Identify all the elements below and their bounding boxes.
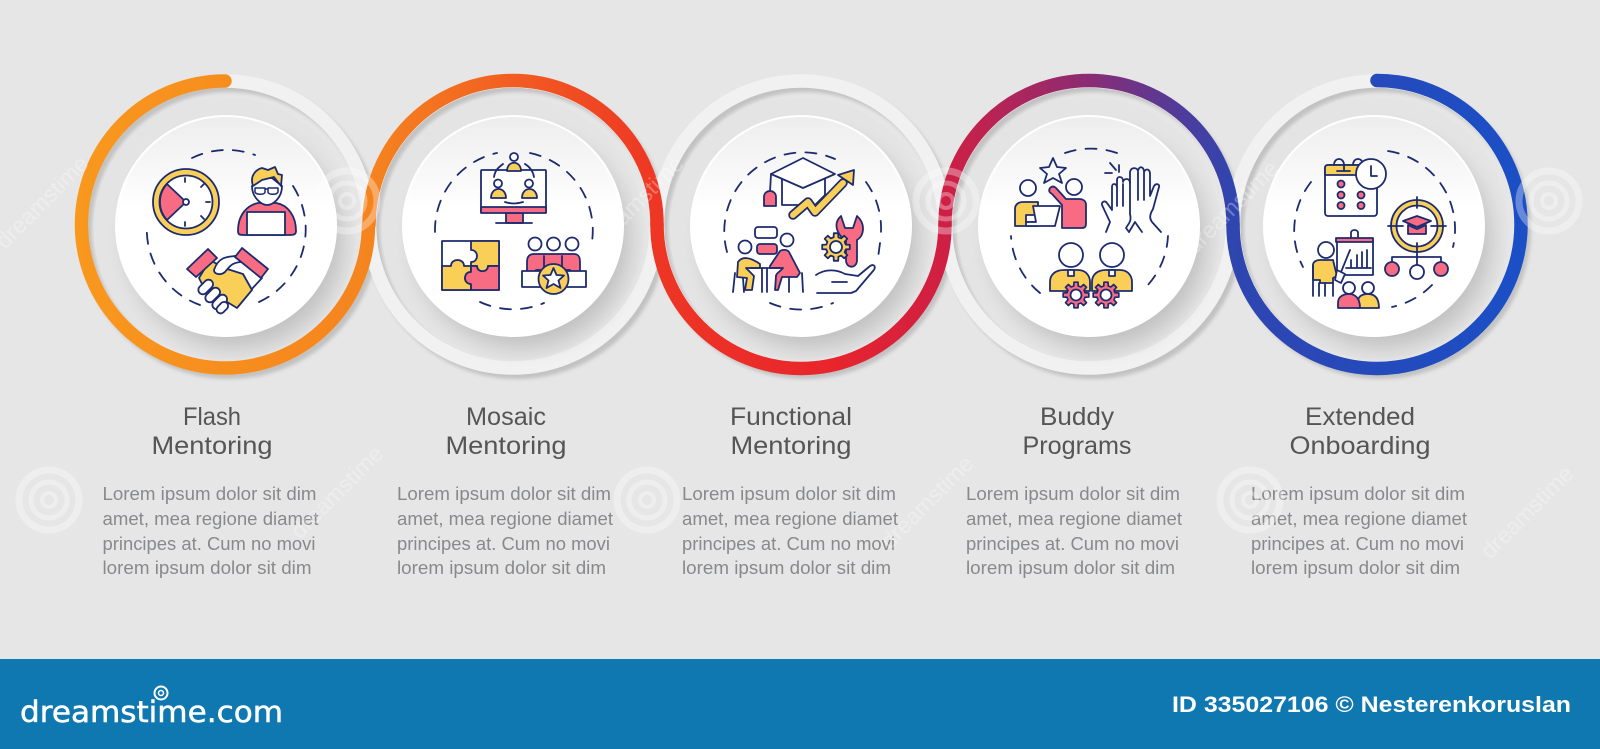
body text 5: Lorem ipsum dolor sit dim (1251, 484, 1465, 504)
clock (153, 169, 219, 235)
column 5 (1251, 403, 1467, 578)
ribbon segment 3 red (657, 224, 945, 368)
ring shadows (86, 86, 1524, 372)
body text 3: principes at. Cum no movi (682, 534, 895, 554)
dreamstime logo: dreamstime.com (20, 695, 283, 729)
dashed circle 5 (1294, 151, 1455, 307)
star (1040, 158, 1066, 183)
ribbon segment 1 orange (82, 81, 369, 368)
watermark spirals and text: dreamstime (285, 440, 388, 544)
heading: Functional Mentoring: Functional (730, 403, 852, 431)
watermark spirals and text: dreamstime (875, 450, 978, 554)
watermark spirals and text (0, 150, 1579, 564)
target with cap (1388, 197, 1446, 256)
heading: Mosaic Mentoring: Mosaic (466, 403, 546, 431)
body text 5 (1251, 484, 1467, 578)
body text 2 (397, 484, 613, 578)
icon 5: extended onboarding (1294, 151, 1455, 308)
heading: Extended Onboarding (1290, 403, 1430, 460)
growth arrow (793, 170, 854, 215)
graduation cap (764, 158, 835, 206)
disc shadows (127, 132, 1491, 348)
body text 1: Lorem ipsum dolor sit dim (102, 484, 316, 504)
body text 5: amet, mea regione diamet (1251, 509, 1467, 529)
body text 1: lorem ipsum dolor sit dim (102, 558, 312, 578)
calendar with clock (1325, 159, 1386, 216)
body text 3: amet, mea regione diamet (682, 509, 898, 529)
white discs (116, 116, 1484, 336)
body text 5: principes at. Cum no movi (1251, 534, 1464, 554)
body text 4: Lorem ipsum dolor sit dim (966, 484, 1180, 504)
icon 2: mosaic mentoring (435, 153, 593, 309)
body text 4: amet, mea regione diamet (966, 509, 1182, 529)
monitor with people (481, 153, 546, 223)
connected colored ribbon (82, 80, 1521, 368)
body text 5: lorem ipsum dolor sit dim (1251, 558, 1460, 578)
column 4 (966, 403, 1182, 578)
dashed circle 2 (435, 153, 593, 309)
body text 2: principes at. Cum no movi (397, 534, 610, 554)
heading: Buddy Programs (1022, 403, 1132, 460)
heading: Mosaic Mentoring (446, 403, 566, 460)
body text 1 (102, 484, 318, 578)
dashed circle 1 (147, 150, 306, 305)
ribbon segment 2 orange to red (369, 80, 657, 224)
inner ring floors (94, 97, 1508, 359)
watermark spirals and text: dreamstime (585, 150, 688, 254)
heading: Functional Mentoring (730, 403, 852, 460)
watermark spirals and text: dreamstime (1180, 155, 1283, 259)
heading: Functional Mentoring: Mentoring (730, 432, 852, 460)
body text 2: amet, mea regione diamet (397, 509, 613, 529)
heading: Extended Onboarding: Onboarding (1290, 432, 1430, 460)
heading: Mosaic Mentoring: Mentoring (446, 432, 566, 460)
ribbon segment 5 blue (1233, 80, 1521, 368)
dashed circle 3 (724, 152, 881, 310)
person with laptop (238, 167, 296, 235)
body text 4: principes at. Cum no movi (966, 534, 1179, 554)
high five hands (1102, 163, 1161, 232)
body text 1: principes at. Cum no movi (102, 534, 316, 554)
column 3 (682, 403, 898, 578)
body text 4: lorem ipsum dolor sit dim (966, 558, 1175, 578)
presenter and board (1313, 230, 1373, 296)
heading: Buddy Programs: Buddy (1040, 403, 1115, 431)
heading: Flash Mentoring (152, 403, 272, 460)
ring tracks (82, 81, 1520, 368)
gear and wrench in hand (816, 216, 875, 293)
icon 1: flash mentoring (147, 150, 306, 315)
handshake (187, 248, 268, 315)
two colleagues with laptop (1015, 179, 1086, 228)
footer bar (0, 659, 1600, 749)
column 2 (397, 403, 613, 578)
hierarchy (1385, 256, 1448, 279)
body text 1: amet, mea regione diamet (102, 509, 318, 529)
body text 3 (682, 484, 898, 578)
two people at table (733, 227, 803, 292)
body text 2: Lorem ipsum dolor sit dim (397, 484, 611, 504)
icon 4: buddy programs (1011, 149, 1168, 308)
puzzle (442, 241, 499, 290)
image id and author: ID 335027106 © Nesterenkoruslan (1172, 692, 1571, 717)
heading: Flash Mentoring: Flash (183, 403, 241, 431)
body text 3: lorem ipsum dolor sit dim (682, 558, 891, 578)
audience (1338, 282, 1379, 308)
body text 4 (966, 484, 1182, 578)
column 1 (102, 403, 318, 578)
team with star badge (522, 238, 586, 294)
body text 2: lorem ipsum dolor sit dim (397, 558, 606, 578)
body text 3: Lorem ipsum dolor sit dim (682, 484, 896, 504)
two people with gears (1050, 243, 1132, 308)
ribbon segment 4 crimson to blue (945, 80, 1233, 224)
dashed circle 4 (1011, 149, 1168, 293)
heading: Extended Onboarding: Extended (1305, 403, 1415, 431)
heading: Buddy Programs: Programs (1022, 432, 1132, 460)
watermark spirals and text: dreamstime (1475, 460, 1578, 564)
icon 3: functional mentoring (724, 152, 881, 310)
heading: Flash Mentoring: Mentoring (152, 432, 272, 460)
